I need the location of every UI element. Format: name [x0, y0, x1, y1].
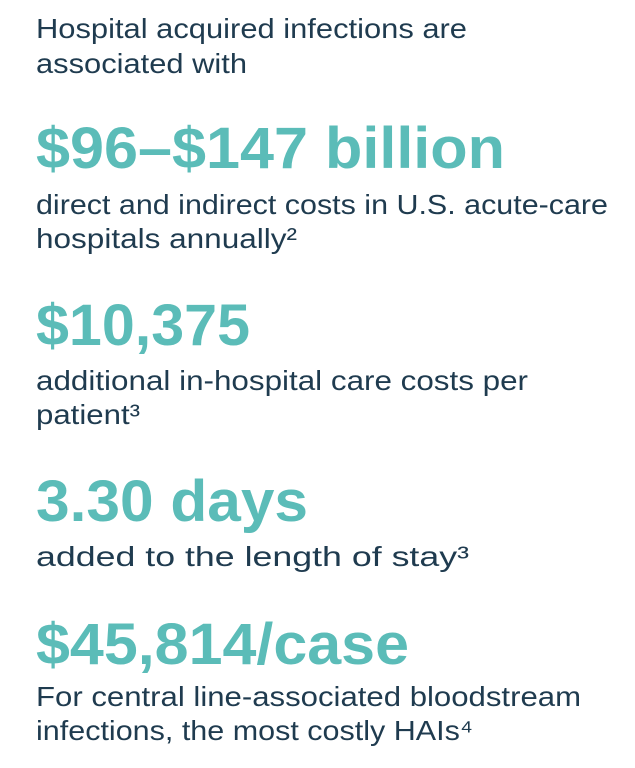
- stat: CLABSI cost: For central line-associated bloodstream: [36, 681, 581, 712]
- stat: CLABSI cost: [36, 612, 581, 746]
- heading: associated with: [36, 48, 247, 79]
- stat: total cost: hospitals annually²: [36, 223, 297, 254]
- stat: length of stay: [36, 469, 469, 572]
- stat: total cost: direct and indirect costs in U.S. acute-care: [36, 189, 608, 220]
- stat: per patient cost: $10,375: [36, 293, 250, 358]
- stat: length of stay: added to the length of stay³: [36, 541, 469, 572]
- stat: length of stay: 3.30 days: [36, 469, 308, 534]
- heading: Hospital acquired infections are: [36, 13, 467, 44]
- stat: CLABSI cost: $45,814/case: [36, 612, 409, 677]
- stat: per patient cost: patient³: [36, 399, 140, 430]
- stat: total cost: [36, 116, 608, 254]
- stat: CLABSI cost: infections, the most costly HAIs⁴: [36, 715, 473, 746]
- stat: total cost: $96–$147 billion: [36, 116, 505, 181]
- heading: [36, 13, 467, 79]
- stat: per patient cost: [36, 293, 528, 430]
- stat: per patient cost: additional in-hospital care costs per: [36, 365, 528, 396]
